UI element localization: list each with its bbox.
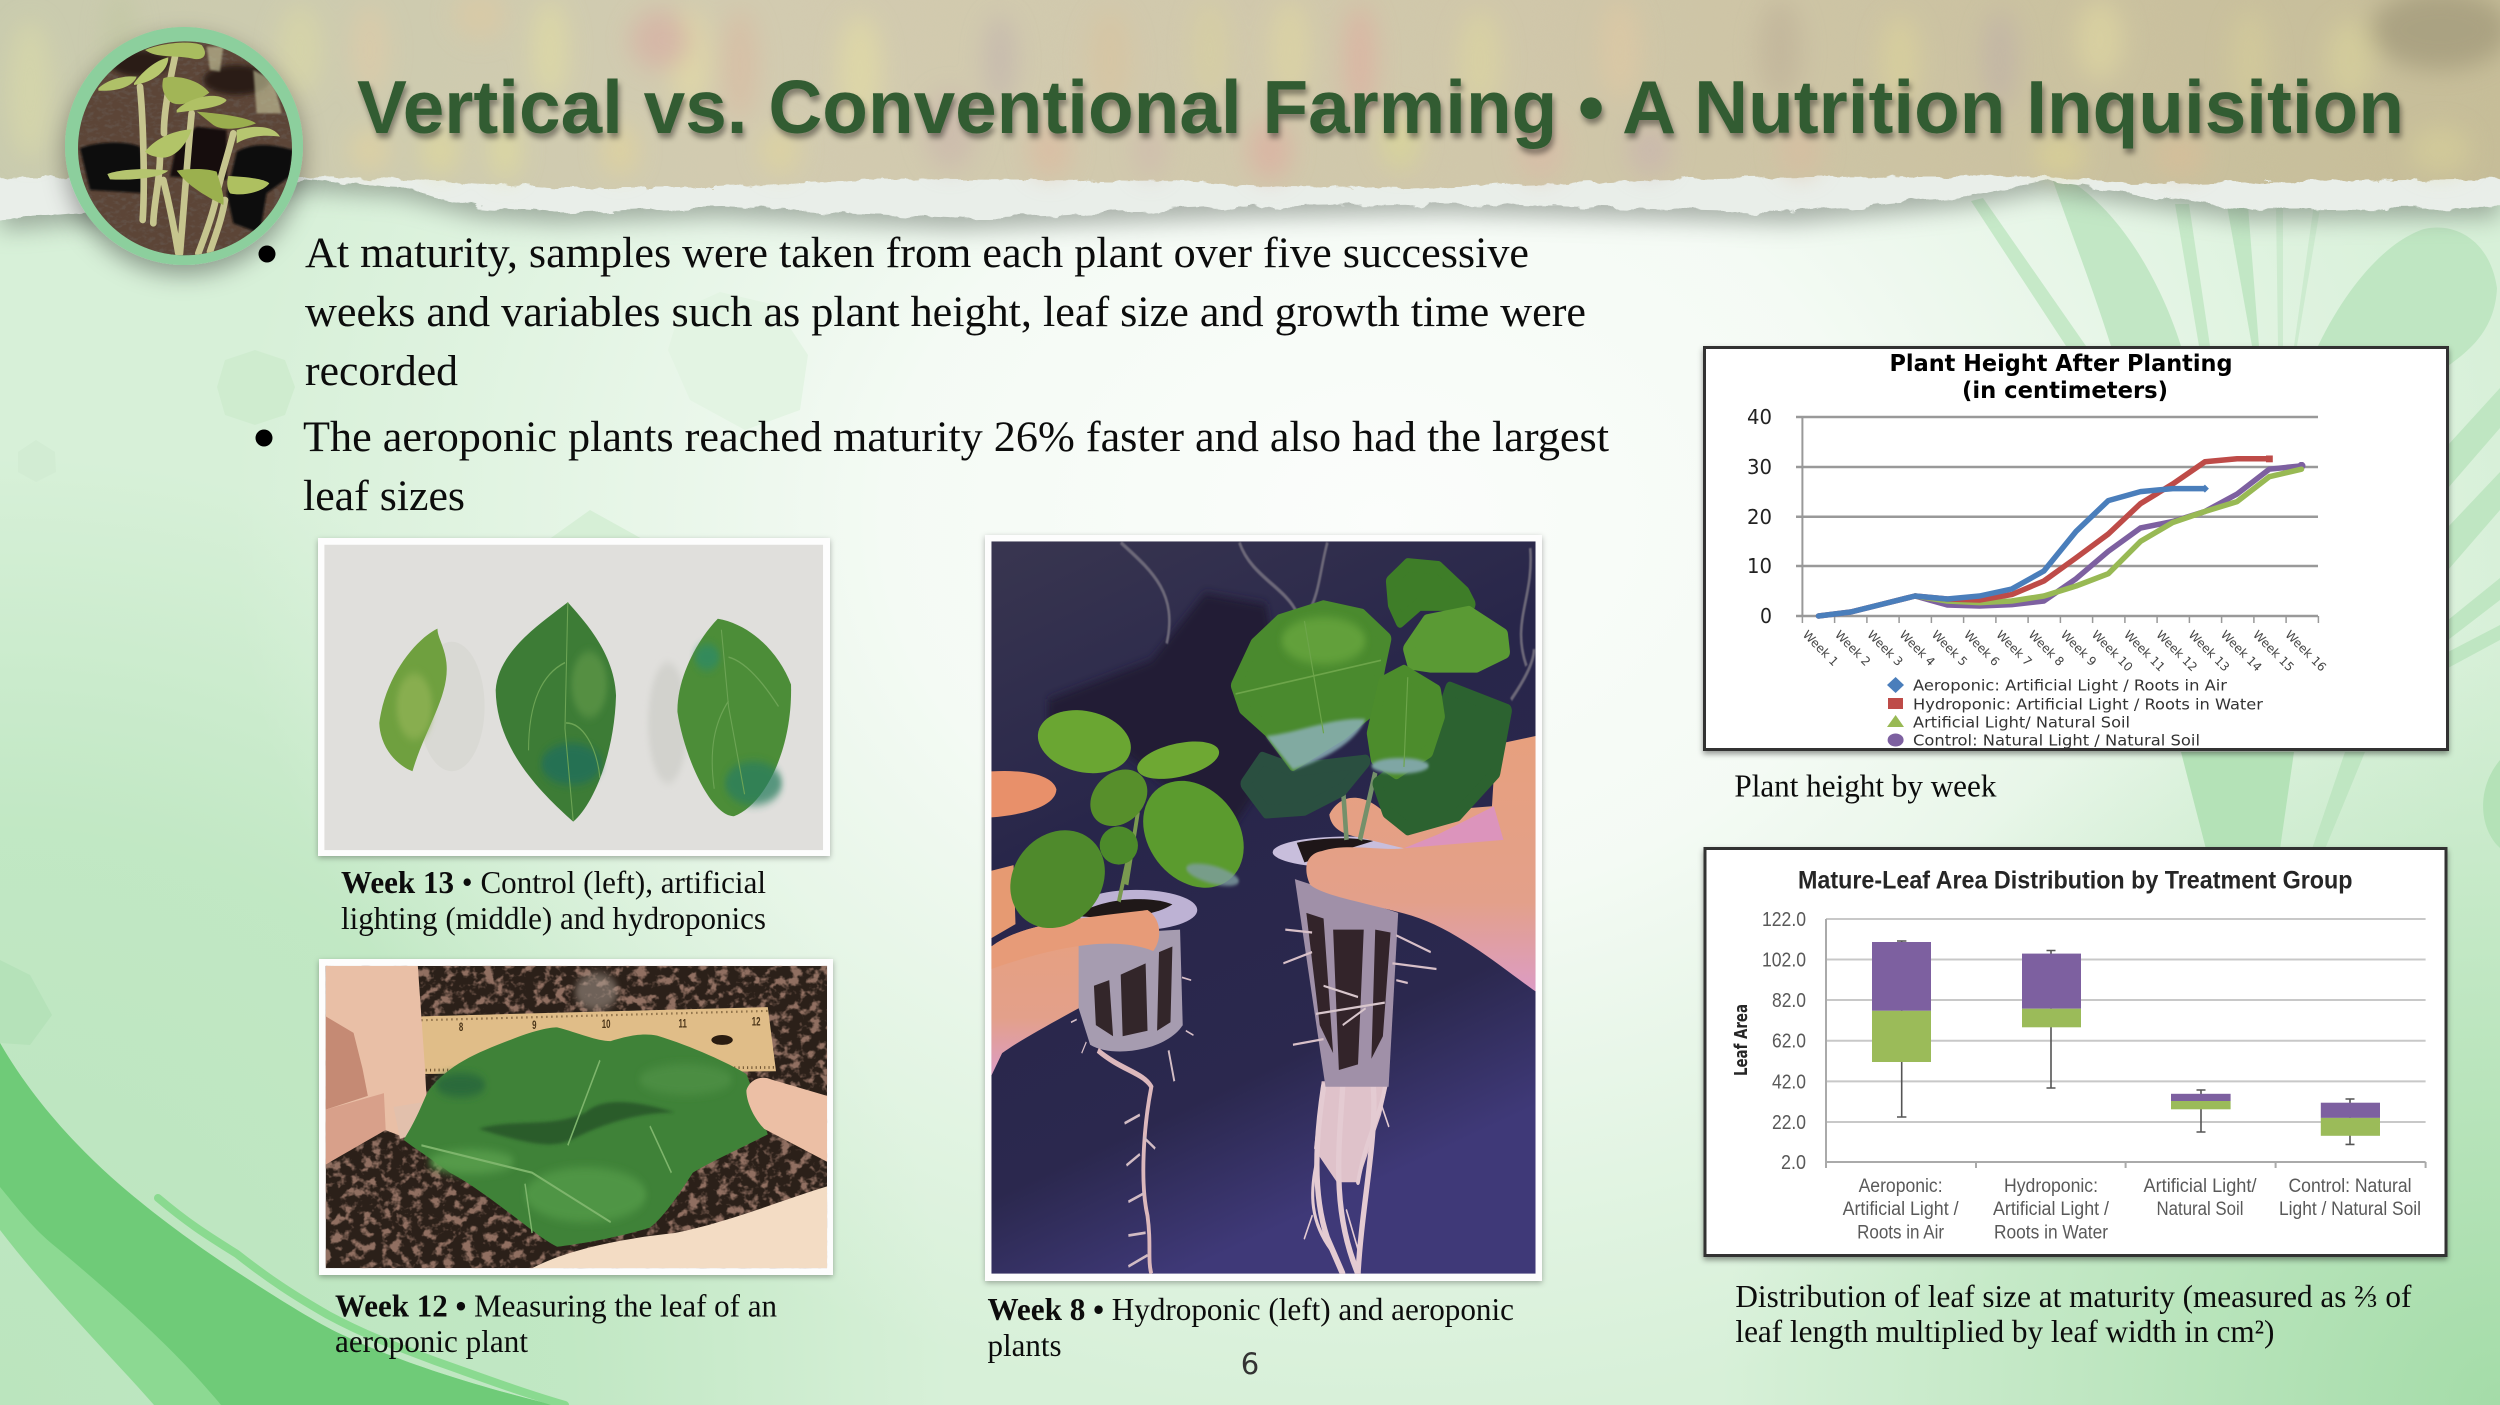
header: torn paper banner (0, 0, 2500, 230)
bullet two: leaf sizes (303, 473, 465, 520)
legend: Control: Natural Light / Natural Soil (1913, 732, 2200, 750)
caption: week 8 line two: plants (988, 1327, 1062, 1363)
category labels: Light / Natural Soil (2279, 1199, 2421, 1220)
bullet one: recorded (305, 348, 458, 395)
line chart: plant height by week (1704, 348, 2448, 750)
caption: plant height chart: Plant height by week (1734, 768, 1996, 804)
x axis week labels (1800, 628, 2329, 674)
box: hydroponic (2022, 954, 2081, 1027)
x axis week labels: Week 15 (2250, 628, 2297, 674)
bullet two (256, 414, 1609, 520)
gridlines and axis (1826, 919, 2426, 1168)
y axis labels: 30 (1747, 455, 1772, 479)
photo: measuring a leaf with a ruler, week 12: 8 (459, 1022, 464, 1035)
bullet one: At maturity, samples were taken from each plant over five successive (305, 230, 1529, 277)
category labels: Roots in Water (1994, 1223, 2109, 1244)
category labels: Artificial Light / (1993, 1199, 2110, 1220)
caption: week 12 line two: aeroponic plant (335, 1323, 528, 1359)
category labels: Natural Soil (2156, 1199, 2244, 1220)
x axis week labels: Week 7 (1993, 628, 2035, 669)
y axis labels: 122.0 (1762, 909, 1806, 931)
box: artificial light, natural soil (2171, 1094, 2231, 1109)
icon: seedling medallion (71, 33, 300, 260)
photo: three basil leaves, week 13 (318, 538, 830, 856)
left roots (1098, 1050, 1151, 1274)
chart title (1890, 351, 2232, 404)
y axis labels: 102.0 (1762, 950, 1806, 972)
y axis labels: 40 (1747, 405, 1772, 429)
x axis week labels: Week 9 (2058, 628, 2099, 669)
legend (1887, 677, 2264, 750)
whiskers (1897, 941, 2354, 1144)
y axis labels: 42.0 (1772, 1071, 1806, 1093)
category labels: Hydroponic: (2004, 1176, 2098, 1197)
x axis week labels: Week 11 (2121, 628, 2168, 674)
y axis labels: 20 (1747, 505, 1772, 529)
right roots (1304, 1081, 1389, 1274)
x axis week labels: Week 16 (2282, 628, 2329, 674)
bullet two: The aeroponic plants reached maturity 26% faster and also had the largest (303, 414, 1609, 461)
x axis week labels: Week 10 (2089, 628, 2136, 674)
x axis week labels: Week 12 (2153, 628, 2200, 674)
y axis labels: 2.0 (1781, 1152, 1806, 1174)
x axis week labels: Week 14 (2218, 628, 2265, 674)
photo: hydroponic and aeroponic basil plants, week 8 (985, 535, 1542, 1281)
legend: Aeroponic: Artificial Light / Roots in Air (1913, 677, 2228, 695)
category labels: Aeroponic: (1859, 1176, 1943, 1197)
category labels (1843, 1176, 2421, 1244)
bullet one (258, 230, 1586, 395)
x axis week labels: Week 5 (1929, 628, 1970, 669)
bullet list (256, 230, 1609, 520)
x axis week labels: Week 13 (2186, 628, 2232, 674)
x axis week labels: Week 4 (1897, 628, 1938, 669)
y axis labels: 82.0 (1772, 990, 1806, 1012)
y axis labels (1762, 909, 1806, 1174)
chart title: (in centimeters) (1962, 378, 2168, 404)
box plot title: Mature-Leaf Area Distribution by Treatment Group (1798, 866, 2352, 894)
right plant stems (1343, 773, 1375, 840)
photo: measuring a leaf with a ruler, week 12 (319, 959, 833, 1275)
series lines (1818, 459, 2302, 616)
category labels: Artificial Light/ (2144, 1176, 2257, 1197)
x axis week labels: Week 8 (2026, 628, 2067, 669)
caption: week 13 line two: lighting (middle) and hydroponics (341, 900, 766, 936)
photo: measuring a leaf with a ruler, week 12: 11 (679, 1018, 687, 1031)
bullet one: weeks and variables such as plant height, leaf size and growth time were (305, 289, 1586, 336)
right plant leaves (1236, 565, 1507, 829)
legend: Artificial Light/ Natural Soil (1913, 713, 2130, 731)
title: Vertical vs. Conventional Farming • A Nutrition Inquisition (357, 65, 2404, 149)
right pot (1295, 879, 1398, 1087)
photo: measuring a leaf with a ruler, week 12: 12 (752, 1016, 761, 1029)
photo: measuring a leaf with a ruler, week 12: 9 (532, 1020, 537, 1033)
y axis title: Leaf Area (1731, 1004, 1752, 1076)
slide number: 6 (1241, 1347, 1259, 1381)
y axis labels (1747, 405, 1772, 628)
box: aeroponic (1872, 942, 1931, 1062)
caption: leaf size distribution (1735, 1278, 2412, 1349)
chart title: Plant Height After Planting (1890, 351, 2232, 377)
left plant leaves (1004, 704, 1253, 940)
y axis labels: 62.0 (1772, 1031, 1806, 1053)
category labels: Control: Natural (2288, 1176, 2412, 1197)
x axis week labels: Week 6 (1961, 628, 2002, 669)
photo: measuring a leaf with a ruler, week 12: 10 (602, 1018, 611, 1031)
caption: week 12: Week 12 • Measuring the leaf of an (335, 1288, 777, 1324)
left pot (1079, 930, 1183, 1051)
caption: week 8: Week 8 • Hydroponic (left) and aeroponic (988, 1291, 1514, 1327)
box: control (2321, 1103, 2380, 1136)
caption: leaf size distribution: Distribution of leaf size at maturity (measured as ⅔ of (1735, 1278, 2412, 1314)
category labels: Roots in Air (1857, 1223, 1945, 1244)
legend: Hydroponic: Artificial Light / Roots in Water (1913, 695, 2264, 713)
left hand fingers (991, 771, 1056, 817)
x axis week labels: Week 1 (1800, 628, 1841, 669)
gridlines and axis (1796, 417, 2318, 623)
y axis labels: 0 (1760, 604, 1772, 628)
x axis week labels: Week 3 (1864, 628, 1906, 669)
seedling leaves (98, 43, 280, 205)
caption: week 13: Week 13 • Control (left), artificial (341, 864, 766, 900)
category labels: Artificial Light / (1843, 1199, 1959, 1220)
x axis week labels: Week 2 (1832, 628, 1873, 669)
box plot: mature-leaf area distribution (1705, 848, 2446, 1256)
caption: leaf size distribution: leaf length multiplied by leaf width in cm²) (1735, 1313, 2274, 1349)
y axis labels: 22.0 (1772, 1112, 1806, 1134)
y axis labels: 10 (1747, 554, 1772, 578)
right hand (1306, 736, 1536, 991)
